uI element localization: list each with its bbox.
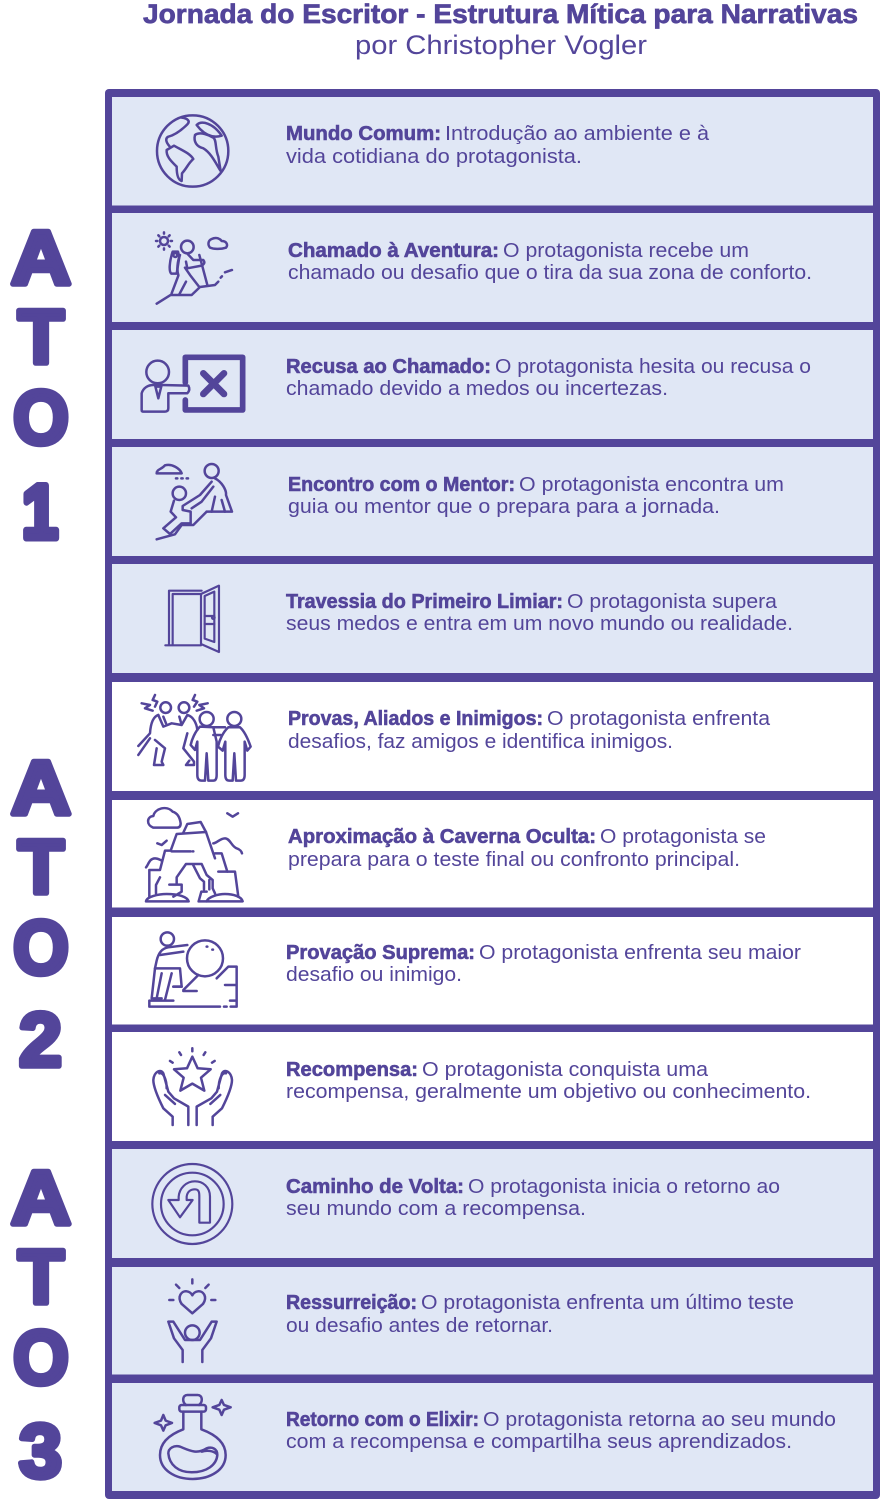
text: Recusa ao Chamado: chamado devido a medos ou incertezas. <box>286 377 668 400</box>
text: Chamado à Aventura: Chamado à Aventura: <box>288 239 499 262</box>
text: Encontro com o Mentor <box>288 473 784 518</box>
text: Travessia do Primeiro Limiar: Travessia do Primeiro Limiar: <box>286 590 563 613</box>
act 2 label: 2 <box>19 998 62 1083</box>
title: por Christopher Vogler <box>355 30 647 60</box>
text: Retorno com o Elixir <box>286 1408 836 1453</box>
act 3 label: A <box>11 1156 71 1241</box>
act 1 label <box>11 216 71 555</box>
text: Provas, Aliados e Inimigos: Provas, Aliados e Inimigos: <box>288 707 543 730</box>
text: Caminho de Volta: seu mundo com a recompensa. <box>286 1197 586 1220</box>
text: Recompensa <box>286 1058 811 1103</box>
icon: U-turn sign <box>152 1164 232 1244</box>
icon: globe <box>157 115 228 187</box>
act 2 label: O <box>13 906 69 991</box>
text: Ressurreição: O protagonista enfrenta um último teste <box>421 1291 794 1314</box>
text: Provação Suprema: Provação Suprema: <box>286 941 475 964</box>
text: Aproximação à Caverna Oculta <box>288 825 766 871</box>
text: Provação Suprema: O protagonista enfrenta seu maior <box>479 941 801 964</box>
text: Retorno com o Elixir: Retorno com o Elixir: <box>286 1408 479 1431</box>
text: Ressurreição <box>286 1291 794 1337</box>
icon: hands holding star <box>153 1048 232 1125</box>
act 1 label: T <box>18 295 64 380</box>
icon: cave mountain <box>146 808 243 901</box>
icon: open door <box>165 586 219 652</box>
text: Caminho de Volta <box>286 1175 780 1220</box>
text: Aproximação à Caverna Oculta: Aproximação à Caverna Oculta: <box>288 825 596 848</box>
text: Chamado à Aventura: O protagonista recebe um <box>503 239 749 262</box>
text: Encontro com o Mentor: Encontro com o Mentor: <box>288 473 515 496</box>
text: Recusa ao Chamado: O protagonista hesita ou recusa o <box>495 355 811 378</box>
text: Provas, Aliados e Inimigos: desafios, faz amigos e identifica inimigos. <box>288 730 673 753</box>
act 1 label: O <box>13 376 69 461</box>
text: Mundo Comum: vida cotidiana do protagonista. <box>286 145 582 168</box>
panel: Chamado à Aventura <box>112 213 873 322</box>
panel: Provação Suprema <box>112 917 873 1024</box>
act 3 label: T <box>18 1235 64 1320</box>
act 1 label: A <box>11 216 71 301</box>
text: Aproximação à Caverna Oculta: O protagonista se <box>600 825 766 848</box>
text: Recompensa: recompensa, geralmente um objetivo ou conhecimento. <box>286 1080 811 1103</box>
panel: Caminho de Volta <box>112 1149 873 1258</box>
act 3 label <box>11 1156 71 1494</box>
text: Retorno com o Elixir: com a recompensa e compartilha seus aprendizados. <box>286 1430 792 1453</box>
icon: mentor helping climber <box>157 464 232 539</box>
icon: fighting people and allies <box>138 695 251 781</box>
text: Travessia do Primeiro Limiar <box>286 590 793 635</box>
act 3 label: O <box>13 1316 69 1401</box>
text: Ressurreição: ou desafio antes de retornar. <box>286 1314 553 1337</box>
text: Encontro com o Mentor: O protagonista encontra um <box>519 473 784 496</box>
text: Recusa ao Chamado <box>286 355 811 400</box>
icon: person raising arms with heart <box>168 1279 217 1362</box>
act 2 label <box>11 746 71 1083</box>
text: Aproximação à Caverna Oculta: prepara para o teste final ou confronto principal. <box>288 848 740 871</box>
text: Caminho de Volta: O protagonista inicia o retorno ao <box>468 1175 780 1198</box>
text: Encontro com o Mentor: guia ou mentor que o prepara para a jornada. <box>288 495 720 518</box>
act 1 label: 1 <box>22 470 58 555</box>
act 2 label: T <box>18 825 64 910</box>
icon: elixir flask <box>155 1395 231 1479</box>
icon: person pushing boulder <box>149 932 237 1007</box>
text: Retorno com o Elixir: O protagonista retorna ao seu mundo <box>483 1408 836 1431</box>
panel: Recusa ao Chamado <box>112 330 873 439</box>
panel: Recompensa <box>112 1032 873 1141</box>
text: Travessia do Primeiro Limiar: O protagonista supera <box>567 590 778 613</box>
text: Mundo Comum <box>286 122 710 168</box>
panel: Aproximação à Caverna Oculta <box>112 800 873 908</box>
text: Chamado à Aventura <box>288 239 812 284</box>
title <box>143 0 858 60</box>
text: Caminho de Volta: Caminho de Volta: <box>286 1175 464 1198</box>
panel: Provas, Aliados e Inimigos <box>112 682 873 791</box>
text: Recompensa: Recompensa: <box>286 1058 418 1081</box>
text: Travessia do Primeiro Limiar: seus medos e entra em um novo mundo ou realidade. <box>286 612 793 635</box>
text: Ressurreição: Ressurreição: <box>286 1291 417 1314</box>
text: Mundo Comum: Introdução ao ambiente e à <box>445 122 710 145</box>
text: Provas, Aliados e Inimigos <box>288 707 771 753</box>
text: Recusa ao Chamado: Recusa ao Chamado: <box>286 355 491 378</box>
panel: Travessia do Primeiro Limiar <box>112 564 873 673</box>
text: Provação Suprema <box>286 941 801 986</box>
panel: Retorno com o Elixir <box>112 1383 873 1491</box>
icon: hiker <box>156 232 232 304</box>
text: Chamado à Aventura: chamado ou desafio que o tira da sua zona de conforto. <box>288 261 812 284</box>
text: Mundo Comum: Mundo Comum: <box>286 122 441 145</box>
act 3 label: 3 <box>19 1409 62 1494</box>
panel: Ressurreição <box>112 1267 873 1374</box>
panel: Encontro com o Mentor <box>112 447 873 556</box>
text: Provação Suprema: desafio ou inimigo. <box>286 963 462 986</box>
text: Provas, Aliados e Inimigos: O protagonista enfrenta <box>547 707 771 730</box>
text: Recompensa: O protagonista conquista uma <box>422 1058 709 1081</box>
panel: Mundo Comum <box>112 97 873 206</box>
icon: person and X board <box>142 357 243 412</box>
act 2 label: A <box>11 746 71 831</box>
